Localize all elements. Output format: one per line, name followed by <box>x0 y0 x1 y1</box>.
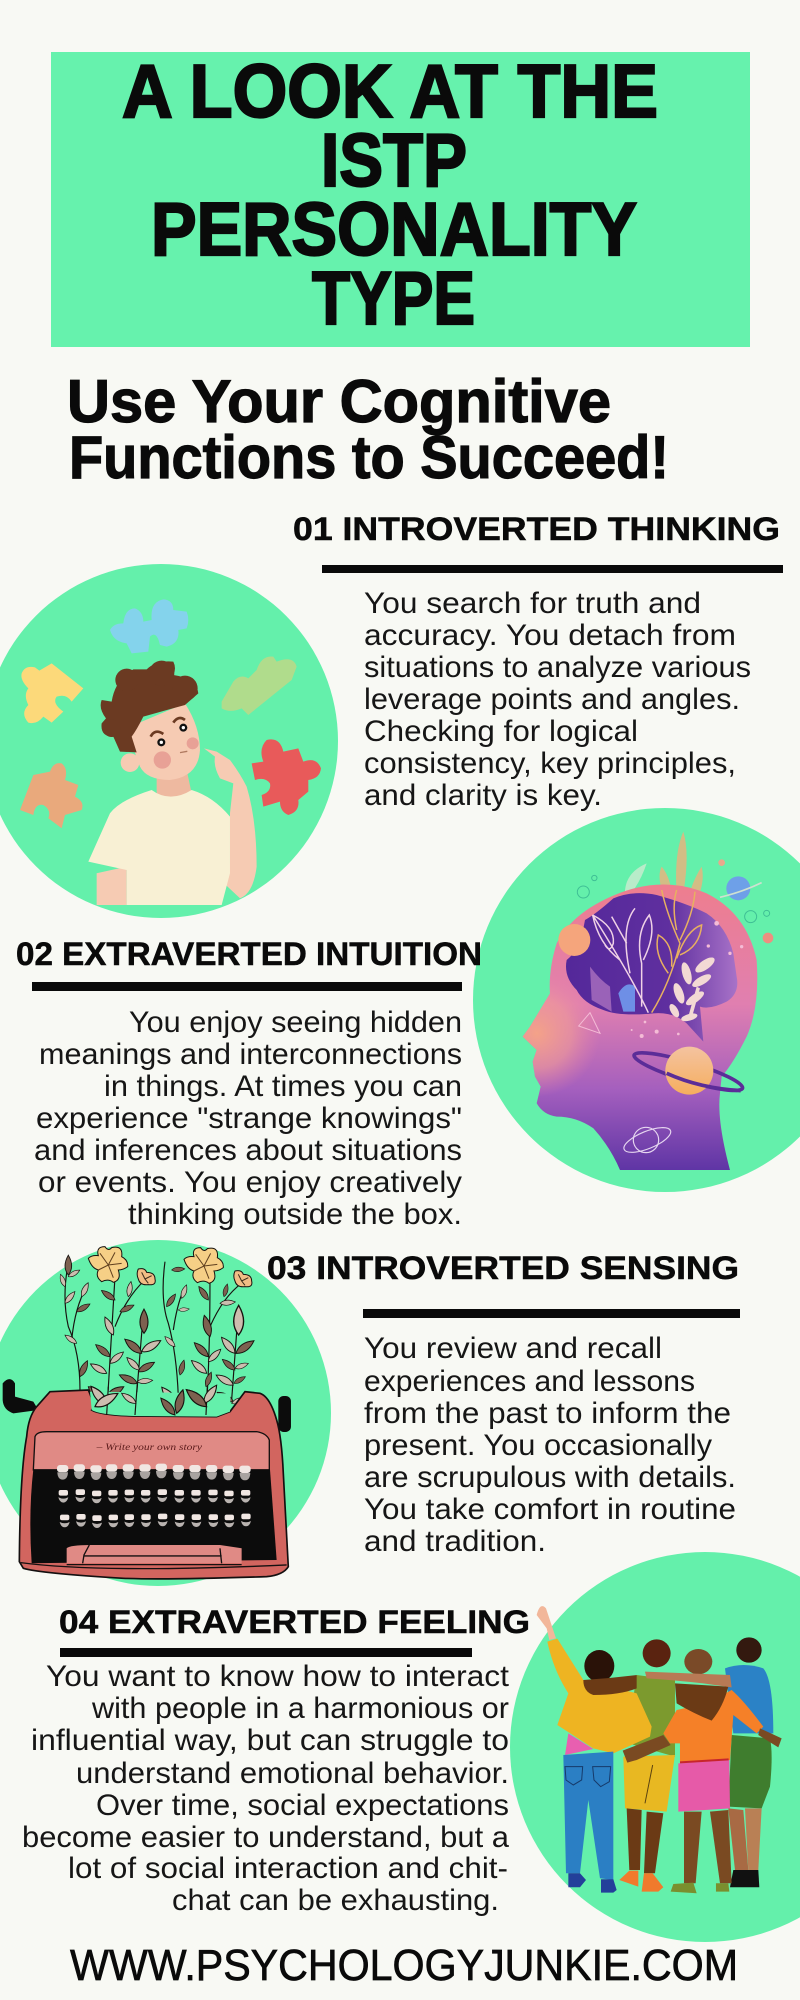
friend two, green top <box>619 1639 675 1892</box>
panel: introverted thinking <box>0 511 783 918</box>
body text 01: consistency, key principles, <box>364 747 736 780</box>
body text 01 <box>364 587 751 812</box>
paper caption: – Write your own story <box>95 1443 203 1453</box>
body text 04: understand emotional behavior. <box>76 1757 509 1790</box>
friend one, yellow top and jeans <box>537 1606 652 1893</box>
body text 01: and clarity is key. <box>364 779 602 812</box>
title banner: ISTP <box>321 118 467 202</box>
body text 02: meanings and interconnections <box>39 1038 462 1071</box>
body text 03: present. You occasionally <box>364 1429 712 1462</box>
body text 03: experiences and lessons <box>364 1365 695 1398</box>
body text 01: Checking for logical <box>364 715 638 748</box>
space bar <box>67 1545 242 1563</box>
illustration: head with brain garden and planets <box>523 832 773 1170</box>
illustration: typewriter with flowers <box>3 1247 291 1579</box>
illustration: thinking person with puzzle pieces <box>20 599 321 905</box>
heading 03: 03 INTROVERTED SENSING <box>267 1250 739 1286</box>
body text 03: You review and recall <box>364 1332 662 1365</box>
panel: introverted sensing <box>0 1240 740 1586</box>
divider bar 03 <box>363 1309 740 1318</box>
body text 04: Over time, social expectations <box>96 1789 509 1822</box>
subtitle: Use Your Cognitive <box>67 368 611 435</box>
body text 02: in things. At times you can <box>104 1070 462 1103</box>
green circle behind thinker <box>0 564 338 918</box>
body text 02: thinking outside the box. <box>128 1198 462 1231</box>
footer website: WWW.PSYCHOLOGYJUNKIE.COM <box>70 1941 738 1990</box>
body text 04: become easier to understand, but a <box>22 1821 509 1854</box>
body text 01: accuracy. You detach from <box>364 619 736 652</box>
paper sheet <box>33 1432 269 1470</box>
title banner: A LOOK AT THE <box>122 49 658 133</box>
divider bar 02 <box>32 982 462 991</box>
body text 03 <box>364 1332 736 1558</box>
keyboard <box>30 1469 277 1563</box>
body text 04: with people in a harmonious or <box>91 1692 509 1725</box>
body text 04: lot of social interaction and chit- <box>68 1852 508 1885</box>
body text 04: chat can be exhausting. <box>172 1884 499 1917</box>
body text 02: and inferences about situations <box>34 1134 462 1167</box>
body text 03: are scrupulous with details. <box>364 1461 736 1494</box>
body text 02: or events. You enjoy creatively <box>38 1166 462 1199</box>
heading 04: 04 EXTRAVERTED FEELING <box>59 1604 530 1640</box>
keys <box>57 1464 251 1528</box>
typewriter base line <box>21 1563 287 1569</box>
body text 04: You want to know how to interact <box>46 1660 510 1693</box>
illustration: four friends with arms around each other <box>537 1606 782 1893</box>
body text 01: You search for truth and <box>364 587 701 620</box>
title banner: PERSONALITY <box>151 187 637 271</box>
divider bar 01 <box>322 565 783 573</box>
divider bar 04 <box>60 1648 472 1657</box>
friend three, orange top and pink shorts <box>623 1649 782 1893</box>
body text 02 <box>34 1006 462 1231</box>
subtitle <box>67 368 669 491</box>
body text 04 <box>22 1660 510 1917</box>
paper slot, showing green behind stems <box>90 1392 231 1417</box>
typewriter roller knobs <box>3 1379 291 1432</box>
green circle behind typewriter <box>0 1240 331 1586</box>
panel: extraverted intuition <box>16 808 800 1231</box>
title banner: TYPE <box>312 256 475 340</box>
body text 01: leverage points and angles. <box>364 683 740 716</box>
heading 01: 01 INTROVERTED THINKING <box>293 511 780 547</box>
body text 04: influential way, but can struggle to <box>31 1724 509 1757</box>
body text 02: experience "strange knowings" <box>36 1102 462 1135</box>
flower stems and leaves <box>58 1247 256 1417</box>
green circle behind head <box>473 808 800 1192</box>
body text 03: You take comfort in routine <box>364 1493 736 1526</box>
typewriter body <box>19 1390 288 1579</box>
friend four, blue shirt <box>725 1637 773 1887</box>
heading 02: 02 EXTRAVERTED INTUITION <box>16 936 482 972</box>
subtitle: Functions to Succeed! <box>69 424 669 491</box>
body text 02: You enjoy seeing hidden <box>129 1006 462 1039</box>
body text 03: and tradition. <box>364 1525 546 1558</box>
body text 03: from the past to inform the <box>364 1397 731 1430</box>
green circle behind group of friends <box>510 1552 800 1942</box>
panel: extraverted feeling <box>22 1552 800 1942</box>
title banner <box>51 49 750 347</box>
body text 01: situations to analyze various <box>364 651 751 684</box>
